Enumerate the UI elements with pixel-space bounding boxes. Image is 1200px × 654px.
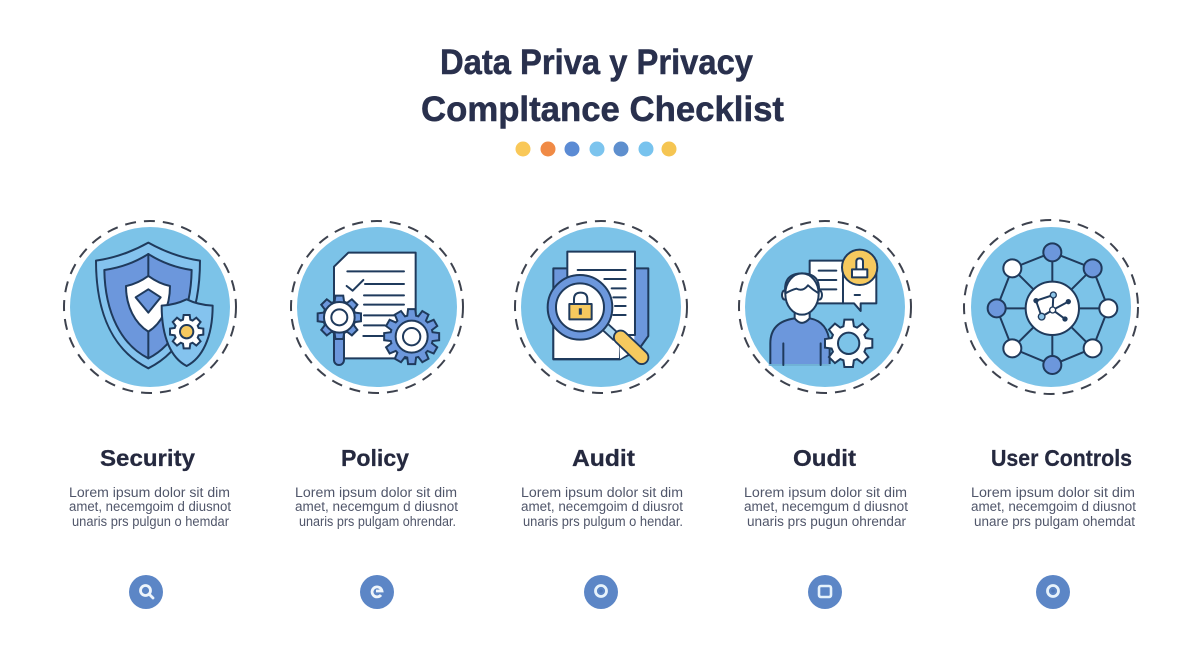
icon: user controls badge (1036, 575, 1070, 609)
icon: policy document with gears (291, 221, 463, 393)
title (421, 43, 784, 129)
column: policy text: Lorem ipsum dolor sit dim (295, 485, 457, 500)
icon: audit magnifier and lock (515, 221, 687, 393)
title: Data Priva y Privacy (440, 43, 753, 82)
column: oudit text: Lorem ipsum dolor sit dim (744, 485, 907, 500)
column: user controls text: unare prs pulgam ohemdat (974, 514, 1135, 529)
column: audit text: Lorem ipsum dolor sit dim (521, 485, 683, 500)
column: user controls text: User Controls (991, 445, 1132, 471)
column: security text: unaris prs pulgun o hemdar (72, 514, 229, 529)
column: audit text: unaris prs pulgum o hendar. (523, 514, 683, 529)
icon: user controls network (964, 220, 1138, 394)
icon: audit badge (584, 575, 618, 609)
column: security text: amet, necemgoim d diusnot (69, 499, 231, 514)
icon: security shields (64, 221, 236, 393)
column: audit text: amet, necemgoim d diusrot (521, 499, 683, 514)
column: user controls text: amet, necemgoim d diusnot (971, 499, 1136, 514)
column: oudit text (744, 445, 908, 529)
column: security text: Security (100, 445, 195, 471)
column: audit text: Audit (572, 445, 635, 471)
column: oudit text: unaris prs pugun ohrendar (747, 514, 907, 529)
column: audit text (521, 445, 683, 529)
icon: oudit badge (808, 575, 842, 609)
icon: policy badge (360, 575, 394, 609)
icon: security badge (129, 575, 163, 609)
column: user controls text: Lorem ipsum dolor sit dim (971, 485, 1135, 500)
title: Compltance Checklist (421, 90, 784, 129)
icon: user with chat and gear (739, 221, 911, 393)
column: security text: Lorem ipsum dolor sit dim (69, 485, 230, 500)
column: policy text: unaris prs pulgam ohrendar. (299, 514, 456, 529)
column: policy text (295, 445, 458, 529)
column: oudit text: Oudit (793, 445, 856, 471)
column: policy text: amet, necemgum d diusnot (295, 499, 458, 514)
column: policy text: Policy (341, 445, 409, 471)
column: user controls text (971, 445, 1136, 529)
decorative dot row (516, 142, 676, 156)
column: oudit text: amet, necemgum d diusnot (744, 499, 908, 514)
column: security text (69, 445, 231, 529)
